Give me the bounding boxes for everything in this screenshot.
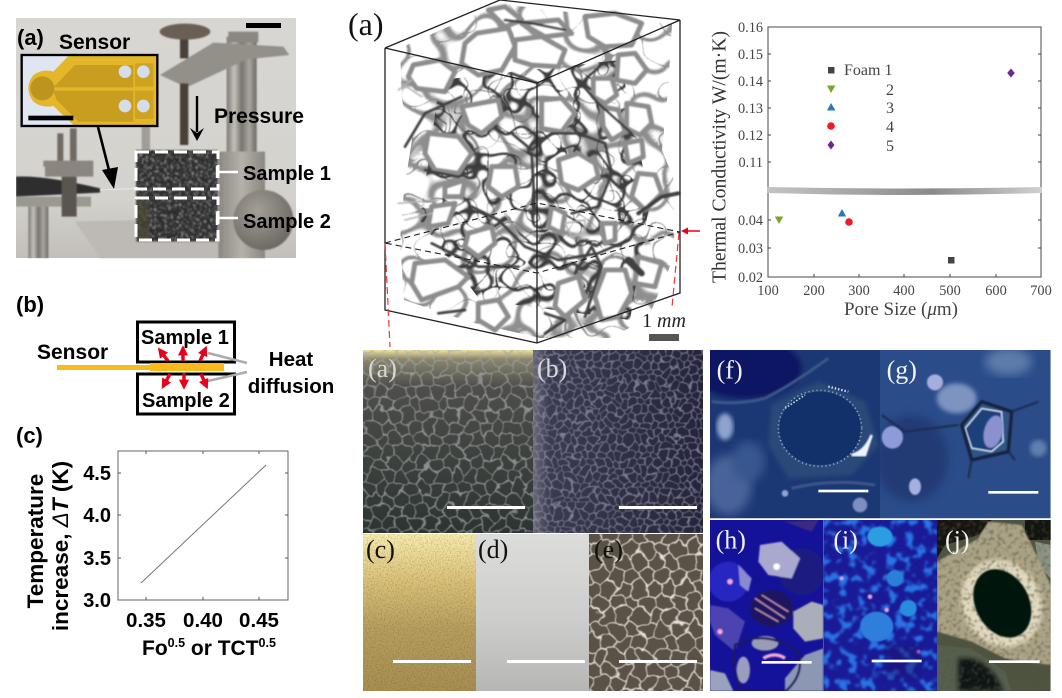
x tick labels: [757, 283, 1052, 299]
panel: 3D foam tomography: [348, 0, 700, 347]
panel: (b) heat diffusion schematic: [16, 292, 334, 414]
cube wireframe: [385, 0, 680, 343]
black scale bar: [246, 23, 281, 28]
y tick labels: 0.12: [738, 128, 763, 144]
dashed box: sample 2: [136, 198, 218, 240]
x tick labels: 0.45: [239, 609, 279, 632]
x tick labels: [126, 609, 279, 632]
box: sample 2: [138, 374, 234, 414]
x tick labels: 0.40: [183, 609, 223, 632]
label Sample 1: Sample 1: [243, 163, 331, 185]
y axis title line 1: Temperature: [23, 474, 48, 608]
photo (e): (e): [594, 535, 623, 564]
photo (c): (c): [366, 535, 395, 564]
text: sensor: Sensor: [37, 341, 108, 364]
x tick labels: 100: [757, 283, 779, 299]
y tick labels: 0.16: [738, 20, 763, 36]
y tick labels: 0.13: [738, 101, 763, 117]
arrow: sensor to setup: [98, 127, 118, 189]
photo (f): (f): [717, 355, 743, 384]
data line: [141, 465, 266, 583]
photo (h): (h): [716, 525, 746, 554]
label (b): (b): [16, 292, 44, 317]
photo (g): (g): [887, 355, 917, 384]
text: sample 1: Sample 1: [141, 327, 229, 349]
y tick labels: 4.0: [83, 505, 111, 527]
y tick labels: 3.5: [83, 548, 111, 570]
photo (e): [589, 534, 703, 691]
photo: clamp apparatus: [16, 24, 293, 258]
x tick labels: 300: [848, 283, 870, 299]
ticks: [118, 451, 288, 600]
red arrow: [681, 228, 700, 234]
legend: 5: [886, 138, 894, 155]
panel: left (a) experimental setup photo: [16, 18, 331, 258]
y tick labels: [83, 463, 111, 612]
panel: (c) temperature line chart: [16, 423, 288, 660]
panel: foam photographs (a)-(e): [363, 350, 703, 691]
x axis title: 0.5: [168, 636, 185, 650]
inset: sensor photo: [22, 55, 157, 126]
photo (c): [363, 534, 476, 691]
y tick labels: 3.0: [83, 590, 111, 612]
x tick labels: 700: [1030, 283, 1052, 299]
label Sensor: Sensor: [59, 31, 130, 54]
photo (h): [708, 520, 825, 692]
x axis title: 0.5: [259, 636, 276, 650]
label (a): (a): [17, 25, 44, 50]
x axis title: Pore Size (μm): [844, 299, 958, 320]
connector: sample 2: [217, 212, 238, 225]
y tick labels: 0.15: [738, 47, 763, 63]
panel: microscope images (f)-(j): [710, 350, 1051, 691]
x tick labels: 200: [803, 283, 825, 299]
connector: sample 1: [217, 166, 238, 178]
legend: 2: [886, 82, 894, 99]
x tick labels: 500: [939, 283, 961, 299]
photo (d): (d): [478, 535, 508, 564]
data points: [775, 68, 1015, 264]
y tick labels: 0.11: [738, 155, 763, 171]
label Pressure: Pressure: [214, 105, 304, 128]
x axis title: or TCT: [185, 637, 259, 660]
photo (g): [875, 348, 1051, 518]
y tick labels: 0.03: [738, 241, 763, 257]
photo (f): [710, 350, 880, 518]
y axis title line 2: increase, ΔT (K): [48, 461, 73, 631]
legend: Foam 1: [844, 62, 892, 79]
label (c): (c): [16, 423, 43, 448]
legend: 3: [886, 100, 894, 117]
sensor strip: [57, 363, 224, 371]
y axis title: Thermal Conductivity W/(m·K): [708, 31, 730, 283]
photo (d): [476, 534, 589, 691]
label (a) top: (a): [348, 6, 384, 42]
text: sample 2: Sample 2: [142, 390, 230, 412]
photo (b): [533, 350, 703, 533]
red heat arrows: [162, 352, 205, 383]
label Sample 2: Sample 2: [243, 211, 331, 233]
y tick labels: [738, 20, 763, 286]
x axis title: Fo: [142, 637, 168, 660]
x tick labels: 0.35: [126, 609, 166, 632]
dashed box: sample 1: [136, 152, 218, 189]
axis break band: [767, 187, 1042, 195]
photo background: [16, 18, 296, 258]
arrow: pressure: [190, 96, 204, 141]
chart: thermal conductivity vs pore size: [708, 20, 1052, 320]
red projection lines: [385, 233, 679, 347]
plot frame: [118, 451, 288, 600]
legend: [827, 62, 894, 155]
scale bar: [649, 334, 679, 341]
photo (a): (a): [368, 354, 397, 383]
y tick labels: 0.04: [738, 213, 763, 229]
y tick labels: 4.5: [83, 463, 111, 485]
ticks: [768, 54, 1041, 277]
dashed slice plane: [385, 203, 680, 273]
legend: 4: [886, 119, 894, 136]
axes frame: [768, 27, 1041, 277]
box: sample 1: [138, 322, 234, 362]
foam web texture: [395, 0, 685, 345]
scale label: 1 mm: [642, 310, 686, 332]
photo (a): [363, 350, 533, 533]
x tick labels: 400: [893, 283, 915, 299]
photo (i): (i): [833, 525, 858, 554]
photo (b): (b): [537, 354, 567, 383]
photo (j): [937, 520, 1058, 691]
y tick labels: 0.02: [738, 270, 763, 286]
foam structure: [398, 7, 678, 333]
x tick labels: 600: [985, 283, 1007, 299]
text: heat diffusion: Heat: [269, 348, 313, 371]
y tick labels: 0.14: [738, 74, 763, 90]
text: diffusion: diffusion: [248, 375, 334, 398]
photo (i): [823, 520, 937, 691]
leader lines: [208, 353, 247, 381]
photo (j): (j): [945, 525, 970, 554]
